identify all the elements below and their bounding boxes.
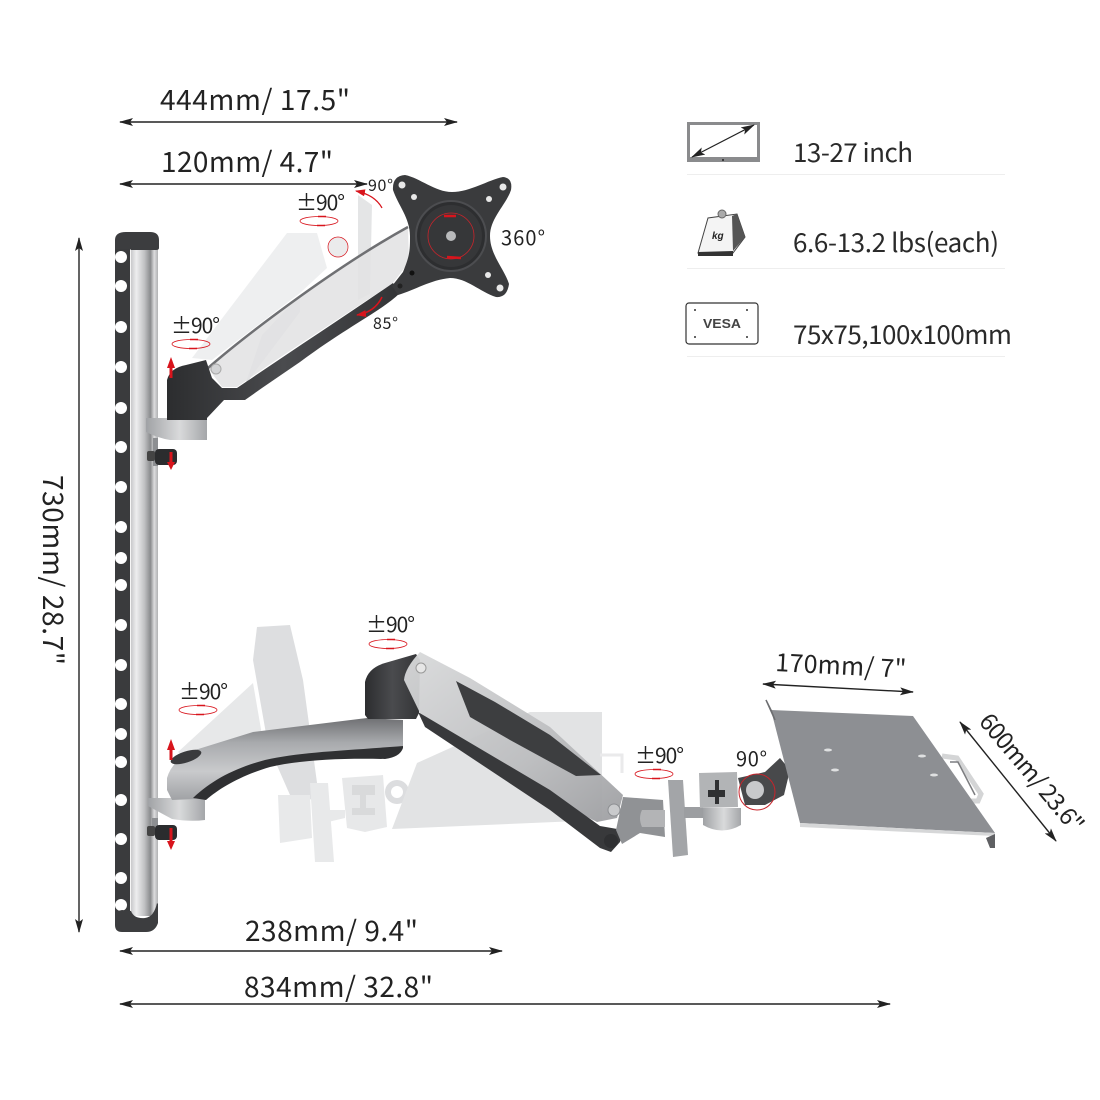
dimension: 444mm: 444mm/ 17.5" (160, 79, 350, 119)
laptop tray (766, 700, 995, 848)
icon: VESA plate (686, 303, 758, 344)
icon: VESA plate: VESA (703, 316, 742, 331)
second gas-spring arm (404, 652, 665, 852)
icon: kg weight: kg (712, 231, 724, 242)
rotation label: 360: 360° (501, 222, 545, 251)
dimension: 834mm: 834mm/ 32.8" (244, 966, 433, 1006)
height arrow: lower mount (167, 739, 175, 760)
rotation label: lower base ±90: ±90° (179, 676, 228, 706)
rotation label: top pivot 90 (356, 172, 393, 208)
rotation label: 85 tilt (357, 297, 398, 334)
icon: kg weight (698, 210, 745, 256)
upper gas-spring arm (167, 227, 409, 420)
first link of lower arm (167, 718, 403, 800)
ghost lower bracket and arm (178, 625, 622, 862)
spec: VESA pattern: 75x75,100x100mm (793, 315, 1012, 352)
dimension: 730mm pole height: 730mm/ 28.7" (34, 475, 74, 665)
spec: weight capacity: 6.6-13.2 lbs(each) (793, 223, 999, 260)
height arrow: upper mount (167, 357, 175, 378)
rotation label: elbow ±90: ±90° (366, 609, 415, 639)
rotation label: upper base ±90: ±90° (171, 310, 220, 340)
spec: screen size (687, 122, 1005, 175)
VESA mounting plate (392, 175, 511, 297)
dimension: 120mm: 120mm/ 4.7" (161, 141, 333, 181)
rotation label: bracket ±90: ±90° (635, 740, 684, 770)
tray bracket (668, 758, 790, 857)
pole with slotted cable channel (115, 232, 159, 932)
rotation label: head swivel ±90: ±90° (296, 187, 345, 217)
spec: weight capacity (687, 210, 1005, 269)
spec: screen size: 13-27 inch (793, 133, 913, 170)
elbow joint (365, 654, 420, 719)
rotation label: 85 tilt: 85° (373, 310, 398, 334)
spec: VESA pattern (686, 303, 1012, 357)
ghost upper arm position (192, 195, 372, 385)
dimension: 170mm tray depth: 170mm/ 7" (775, 643, 907, 686)
upper arm mount (146, 418, 207, 470)
icon: monitor diagonal (687, 122, 760, 162)
lower arm mount (147, 798, 205, 850)
dimension: 238mm: 238mm/ 9.4" (245, 910, 418, 950)
rotation label: tray tilt 90: 90° (736, 743, 767, 772)
dimension: 600mm tray width: 600mm/ 23.6" (973, 704, 1094, 839)
rotation label: top pivot 90: 90° (368, 172, 393, 196)
